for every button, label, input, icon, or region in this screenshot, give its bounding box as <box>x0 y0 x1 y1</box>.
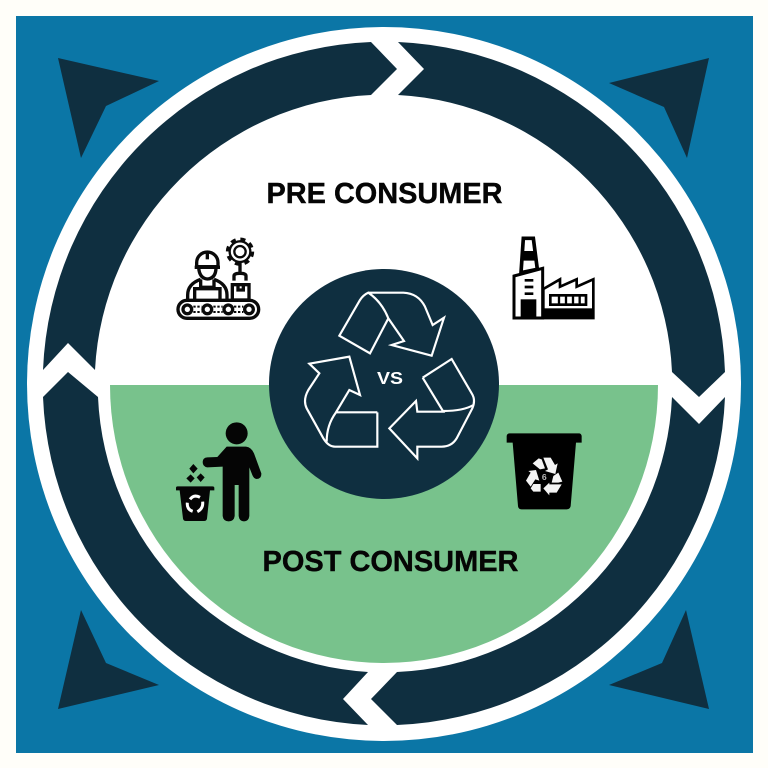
icon: recycling arrows outline <box>305 293 474 458</box>
corner arrowheads <box>58 58 709 709</box>
heading: pre consumer: PRE CONSUMER <box>266 178 503 210</box>
circular arrow ring <box>43 42 725 725</box>
icon: recycling bin <box>507 433 582 509</box>
center dark circle <box>269 269 499 499</box>
icon: person throwing trash into bin <box>176 422 261 521</box>
green post consumer half <box>110 385 658 663</box>
heading: post consumer: POST CONSUMER <box>262 546 519 578</box>
icon: factory with chimney <box>514 238 594 319</box>
icon: factory worker on conveyor <box>178 239 259 318</box>
icon: recycling bin: 6 <box>542 472 547 482</box>
vs label: VS <box>377 368 403 388</box>
